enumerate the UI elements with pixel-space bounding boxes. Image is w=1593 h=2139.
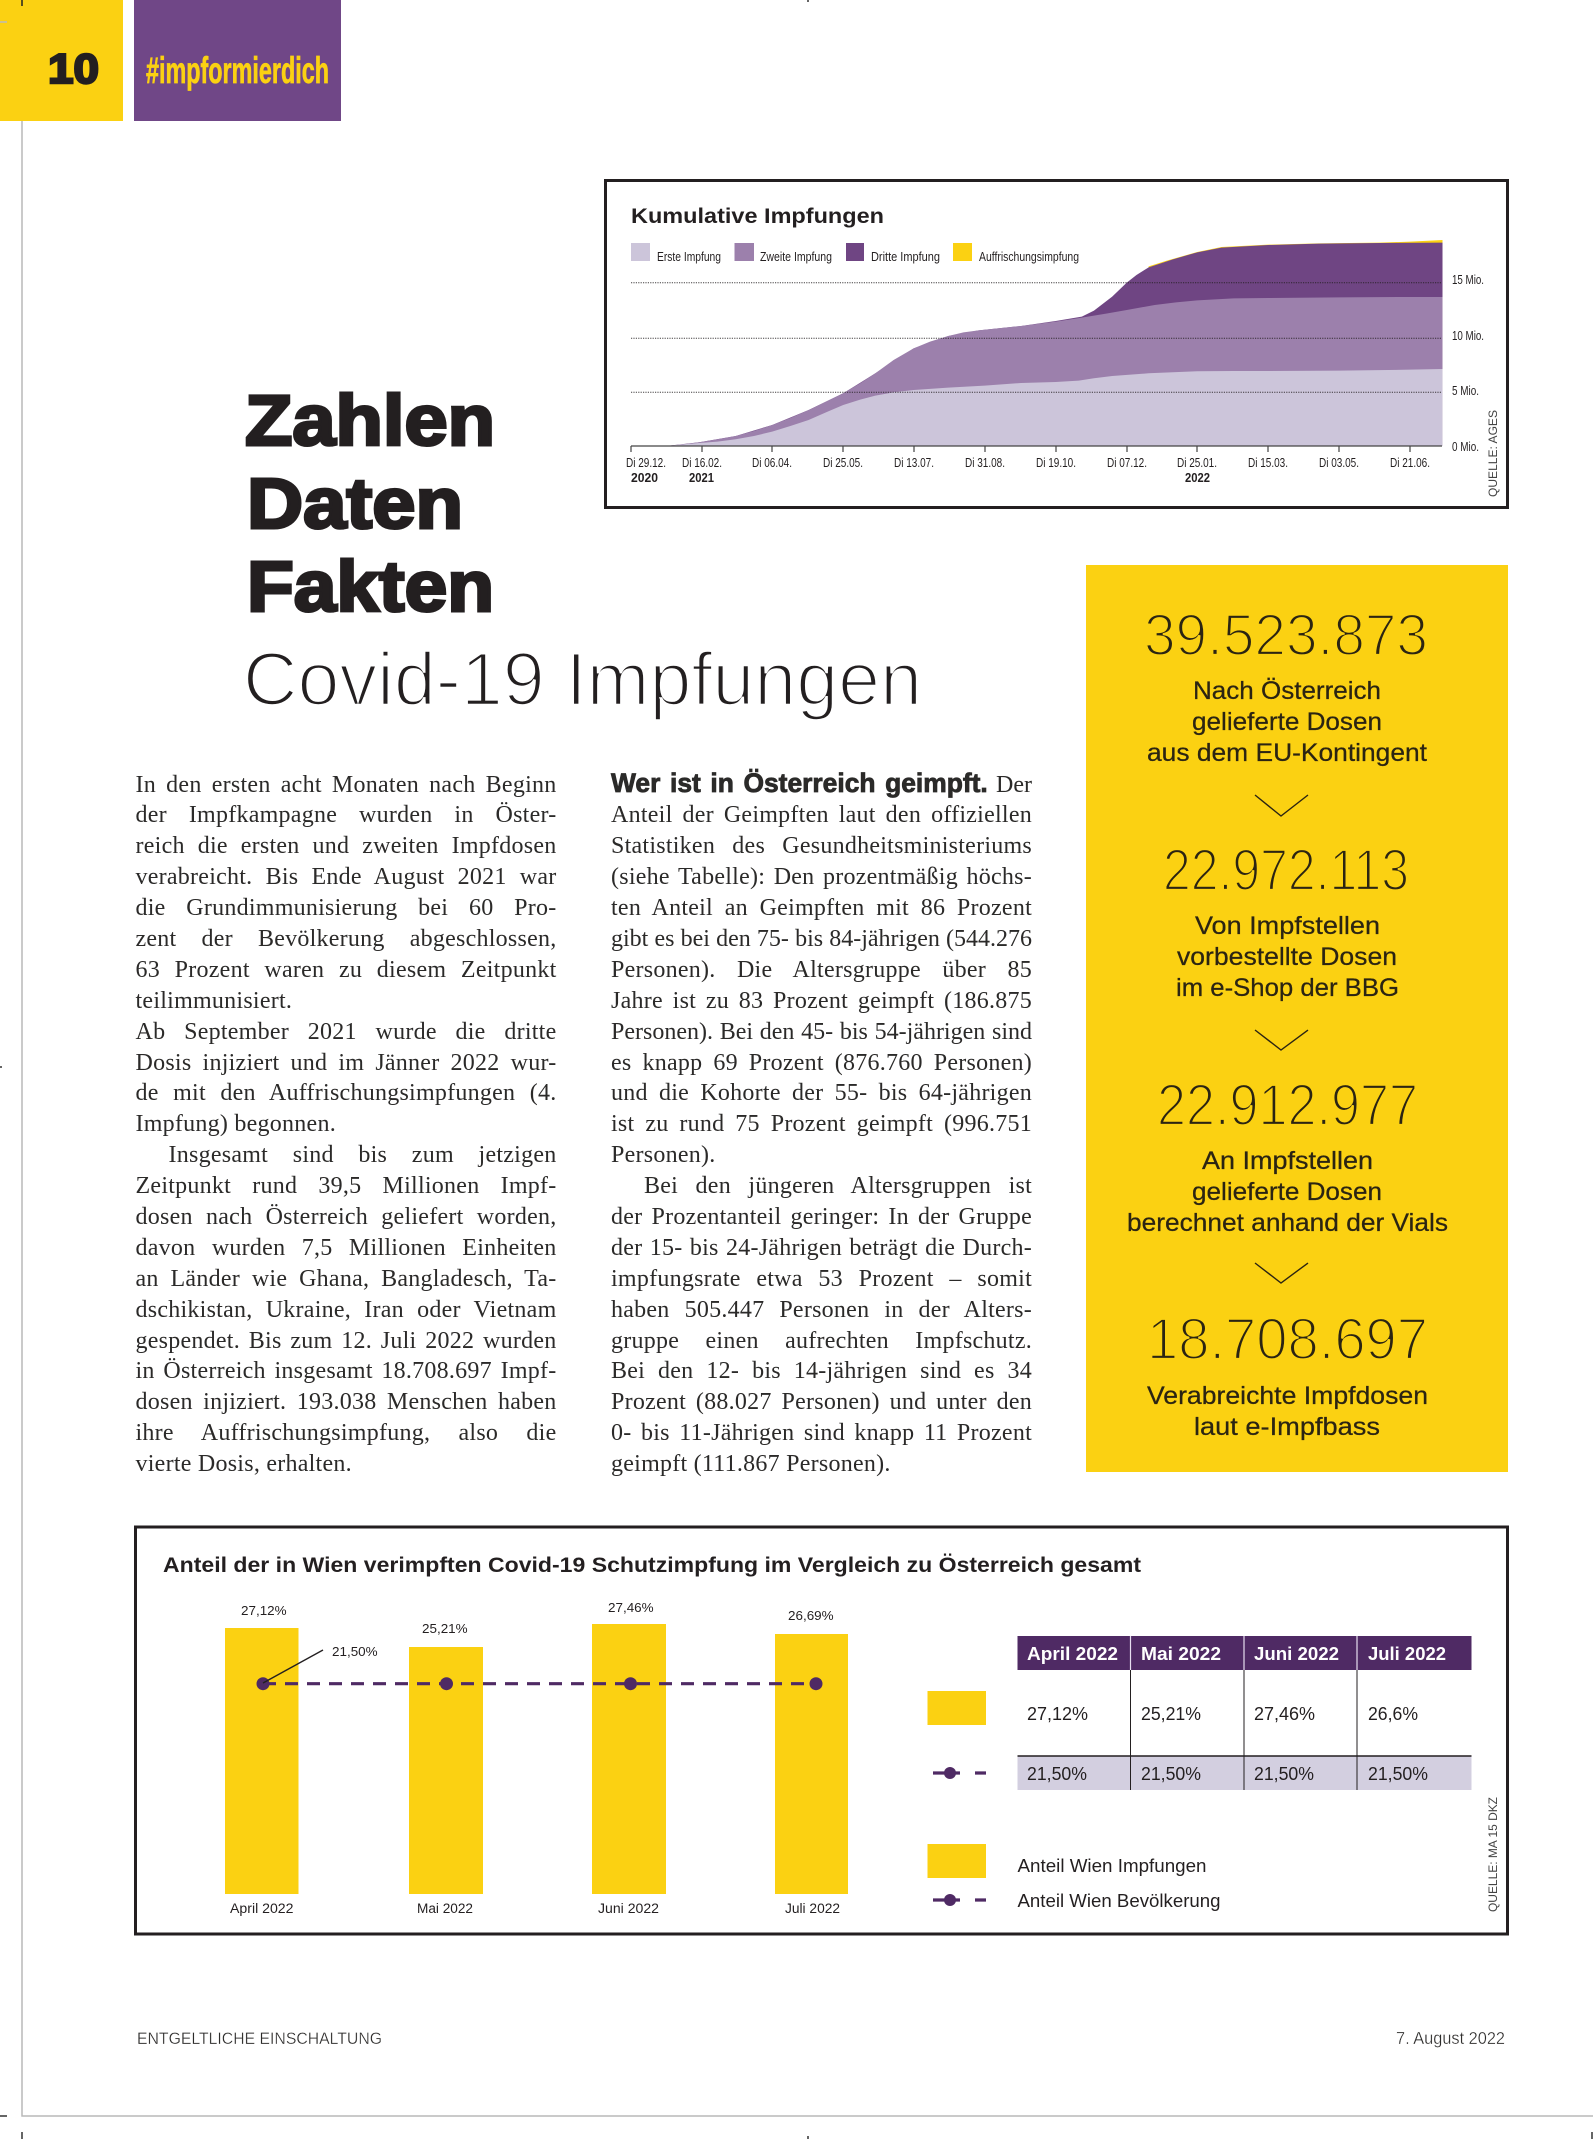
data table: Juni 2022 bbox=[1254, 1644, 1339, 1664]
legend: Anteil Wien Impfungen bbox=[1018, 1856, 1206, 1876]
text block: column 2: Prozent (88.027 Personen) und unter den bbox=[611, 1389, 1032, 1415]
text block: column 2: Jahre ist zu 83 Prozent geimpft (186.875 bbox=[611, 988, 1032, 1014]
text block: column 1: reich die ersten und zweiten Impfdosen bbox=[136, 833, 556, 859]
text block: column 1: ihre Auffrischungsimpfung, also die bbox=[136, 1420, 556, 1446]
y axis labels: 15 Mio. bbox=[1452, 272, 1484, 287]
footer date: 7. August 2022 bbox=[1396, 2028, 1505, 2048]
text block: column 2: 0- bis 11-Jährigen sind knapp 11 Prozent bbox=[611, 1420, 1032, 1446]
x axis labels: Di 25.05. bbox=[823, 455, 863, 470]
x axis labels: 2022 bbox=[1185, 470, 1210, 485]
data table: Juli 2022 bbox=[1368, 1644, 1446, 1664]
text block: column 1 bbox=[136, 772, 556, 1477]
text block: column 2: Wer ist in Österreich geimpft. Der bbox=[611, 768, 1032, 798]
data table: 27,12% bbox=[1027, 1704, 1088, 1724]
title: Fakten bbox=[247, 548, 494, 627]
stat: supplied: 22.912.977 bbox=[1157, 1073, 1418, 1138]
panel: cumulative vaccinations chart bbox=[606, 180, 1508, 508]
text block: column 1: 63 Prozent waren zu diesem Zeitpunkt bbox=[136, 957, 556, 983]
text block: column 2: Personen). Die Altersgruppe über 85 bbox=[611, 957, 1032, 983]
text block: column 1: vierte Dosis, erhalten. bbox=[136, 1451, 352, 1477]
x axis bbox=[631, 446, 1442, 452]
text block: column 2: geimpft (111.867 Personen). bbox=[611, 1451, 891, 1477]
x axis labels: Di 13.07. bbox=[894, 455, 934, 470]
text block: column 2: ten Anteil an Geimpften mit 86 Prozent bbox=[611, 895, 1032, 921]
text block: column 2: Anteil der Geimpften laut den offiziellen bbox=[611, 802, 1032, 828]
x axis labels: 2021 bbox=[689, 470, 714, 485]
source: QUELLE: AGES bbox=[1486, 410, 1500, 497]
text block: column 1: gespendet. Bis zum 12. Juli 2022 wurden bbox=[136, 1328, 556, 1354]
x axis labels: 2020 bbox=[631, 470, 658, 485]
text block: column 2: es knapp 69 Prozent (876.760 Personen) bbox=[611, 1050, 1032, 1076]
text block: column 1: Insgesamt sind bis zum jetzigen bbox=[168, 1142, 556, 1168]
legend: Auffrischungsimpfung bbox=[979, 249, 1079, 264]
text block: column 1: dosen nach Österreich geliefert worden, bbox=[136, 1204, 556, 1230]
text block: column 1: Impfung) begonnen. bbox=[136, 1111, 336, 1137]
callout: 21,50% bbox=[332, 1644, 378, 1659]
data table: 21,50% bbox=[1141, 1764, 1201, 1784]
text block: column 1: Ab September 2021 wurde die dritte bbox=[136, 1019, 556, 1045]
arrow 2 bbox=[1255, 1030, 1308, 1050]
data table: Mai 2022 bbox=[1141, 1644, 1221, 1664]
x axis labels: Di 15.03. bbox=[1248, 455, 1288, 470]
data table: 25,21% bbox=[1141, 1704, 1201, 1724]
source: QUELLE: MA 15 DKZ bbox=[1486, 1797, 1500, 1912]
x axis labels bbox=[626, 455, 1430, 485]
bar values: 26,69% bbox=[788, 1608, 834, 1623]
stat: delivered: gelieferte Dosen bbox=[1192, 708, 1382, 736]
stat: supplied: berechnet anhand der Vials bbox=[1127, 1209, 1448, 1237]
text block: column 1: dschikistan, Ukraine, Iran oder Vietnam bbox=[136, 1297, 556, 1323]
text block: column 2: der Prozentanteil geringer: In der Gruppe bbox=[611, 1204, 1032, 1230]
data table bbox=[1018, 1636, 1472, 1790]
text block: column 2: und die Kohorte der 55- bis 64-jährigen bbox=[611, 1080, 1032, 1106]
data table: 26,6% bbox=[1368, 1704, 1418, 1724]
hashtag tab: #impformierdich bbox=[146, 50, 329, 91]
panel: Vienna share chart bbox=[136, 1527, 1508, 1934]
text block: column 1: In den ersten acht Monaten nach Beginn bbox=[136, 772, 556, 798]
text block: column 1: de mit den Auffrischungsimpfungen (4. bbox=[136, 1080, 556, 1106]
text block: column 1: Dosis injiziert und im Jänner 2022 wur- bbox=[136, 1050, 556, 1076]
x axis labels: Di 31.08. bbox=[965, 455, 1005, 470]
table row keys bbox=[928, 1691, 986, 1779]
text block: column 2 bbox=[610, 768, 1032, 1477]
stat: pre-ordered: vorbestellte Dosen bbox=[1177, 943, 1397, 971]
stat: supplied bbox=[1127, 1073, 1448, 1237]
stat: delivered: Nach Österreich bbox=[1193, 677, 1381, 705]
text block: column 1: an Länder wie Ghana, Bangladesch, Ta- bbox=[136, 1266, 556, 1292]
bar values: 27,46% bbox=[608, 1600, 654, 1615]
subtitle: Covid-19 Impfungen bbox=[243, 637, 922, 721]
month labels: Juni 2022 bbox=[598, 1901, 659, 1916]
text block: column 2: Bei den 12- bis 14-jährigen sind es 34 bbox=[611, 1358, 1032, 1384]
bar values: 25,21% bbox=[422, 1621, 468, 1636]
stat: delivered: aus dem EU-Kontingent bbox=[1147, 739, 1427, 767]
callout bbox=[263, 1644, 378, 1683]
x axis labels: Di 25.01. bbox=[1177, 455, 1217, 470]
data table: 27,46% bbox=[1254, 1704, 1315, 1724]
bar values bbox=[241, 1600, 834, 1636]
x axis labels: Di 19.10. bbox=[1036, 455, 1076, 470]
x axis labels: Di 16.02. bbox=[682, 455, 722, 470]
x axis labels: Di 03.05. bbox=[1319, 455, 1359, 470]
x axis labels: Di 21.06. bbox=[1390, 455, 1430, 470]
population line bbox=[256, 1677, 822, 1690]
text block: column 2: impfungsrate etwa 53 Prozent – somit bbox=[611, 1266, 1032, 1292]
grid lines bbox=[631, 283, 1442, 392]
text block: column 1: in Österreich insgesamt 18.708.697 Impf- bbox=[136, 1358, 556, 1384]
text block: column 1: die Grundimmunisierung bei 60 Pro- bbox=[136, 895, 556, 921]
text block: column 1: verabreicht. Bis Ende August 2021 war bbox=[136, 864, 556, 890]
text block: column 1: zent der Bevölkerung abgeschlossen, bbox=[136, 926, 556, 952]
page number tab bbox=[0, 0, 123, 121]
title bbox=[245, 382, 495, 627]
stat: pre-ordered: 22.972.113 bbox=[1163, 838, 1409, 903]
x axis labels: Di 29.12. bbox=[626, 455, 666, 470]
stat: administered: 18.708.697 bbox=[1147, 1307, 1428, 1372]
stat: administered: Verabreichte Impfdosen bbox=[1147, 1382, 1428, 1410]
panel: delivered doses bbox=[1086, 565, 1508, 1472]
text block: column 2: gruppe einen aufrechten Impfschutz. bbox=[611, 1328, 1032, 1354]
text block: column 2: ist zu rund 75 Prozent geimpft (996.751 bbox=[611, 1111, 1032, 1137]
legend: Zweite Impfung bbox=[760, 249, 832, 264]
text block: column 2: der 15- bis 24-Jährigen beträgt die Durch- bbox=[611, 1235, 1032, 1261]
text block: column 1: dosen injiziert. 193.038 Menschen haben bbox=[136, 1389, 556, 1415]
legend: Erste Impfung bbox=[657, 249, 721, 264]
data table: April 2022 bbox=[1027, 1644, 1118, 1664]
text block: column 2: (siehe Tabelle): Den prozentmäßig höchs- bbox=[611, 864, 1032, 890]
bar values: 27,12% bbox=[241, 1603, 287, 1618]
legend bbox=[928, 1844, 1220, 1911]
bars bbox=[225, 1624, 848, 1894]
stat: delivered: 39.523.873 bbox=[1144, 603, 1428, 668]
arrow 3 bbox=[1255, 1263, 1308, 1283]
x axis labels: Di 06.04. bbox=[752, 455, 792, 470]
chart title: Anteil der in Wien verimpften Covid-19 Schutzimpfung im Vergleich zu Österreich gesamt bbox=[163, 1552, 1141, 1577]
data table: 21,50% bbox=[1027, 1764, 1087, 1784]
data table: 21,50% bbox=[1254, 1764, 1314, 1784]
stat: pre-ordered bbox=[1163, 838, 1409, 1002]
stacked area chart bbox=[631, 240, 1443, 446]
legend: Anteil Wien Bevölkerung bbox=[1018, 1891, 1220, 1911]
y axis labels: 10 Mio. bbox=[1452, 328, 1484, 343]
stat: delivered bbox=[1144, 603, 1428, 767]
legend: Dritte Impfung bbox=[871, 249, 940, 264]
hashtag tab bbox=[134, 0, 341, 121]
x axis labels: Di 07.12. bbox=[1107, 455, 1147, 470]
stat: pre-ordered: Von Impfstellen bbox=[1195, 912, 1380, 940]
stat: administered: laut e-Impfbass bbox=[1194, 1413, 1380, 1441]
text block: column 1: teilimmunisiert. bbox=[136, 988, 292, 1014]
month labels: April 2022 bbox=[230, 1901, 294, 1916]
stat: pre-ordered: im e-Shop der BBG bbox=[1176, 974, 1399, 1002]
month labels bbox=[230, 1901, 840, 1916]
text block: column 2: haben 505.447 Personen in der Alters- bbox=[611, 1297, 1032, 1323]
text block: column 2: Statistiken des Gesundheitsministeriums bbox=[611, 833, 1032, 859]
y axis labels: 0 Mio. bbox=[1452, 439, 1479, 454]
chart title: Kumulative Impfungen bbox=[631, 204, 884, 228]
title: Daten bbox=[247, 465, 463, 544]
y axis labels bbox=[1452, 272, 1484, 454]
month labels: Juli 2022 bbox=[785, 1901, 840, 1916]
legend bbox=[631, 243, 1079, 264]
stat: administered bbox=[1147, 1307, 1428, 1441]
month labels: Mai 2022 bbox=[417, 1901, 473, 1916]
arrow 1 bbox=[1255, 795, 1308, 816]
text block: column 2: gibt es bei den 75- bis 84-jährigen (544.276 bbox=[611, 926, 1032, 952]
footer left: ENTGELTLICHE EINSCHALTUNG bbox=[137, 2029, 382, 2048]
text block: column 2: Personen). Bei den 45- bis 54-jährigen sind bbox=[611, 1019, 1032, 1045]
page number tab: 10 bbox=[48, 45, 99, 92]
text block: column 2: Personen). bbox=[611, 1142, 715, 1168]
data table: 21,50% bbox=[1368, 1764, 1428, 1784]
text block: column 2: Bei den jüngeren Altersgruppen ist bbox=[644, 1173, 1032, 1199]
stat: supplied: gelieferte Dosen bbox=[1192, 1178, 1382, 1206]
y axis labels: 5 Mio. bbox=[1452, 383, 1479, 398]
text block: column 1: davon wurden 7,5 Millionen Einheiten bbox=[136, 1235, 556, 1261]
stat: supplied: An Impfstellen bbox=[1202, 1147, 1373, 1175]
text block: column 1: der Impfkampagne wurden in Öster- bbox=[136, 802, 556, 828]
title: Zahlen bbox=[245, 382, 495, 461]
text block: column 1: Zeitpunkt rund 39,5 Millionen Impf- bbox=[136, 1173, 556, 1199]
